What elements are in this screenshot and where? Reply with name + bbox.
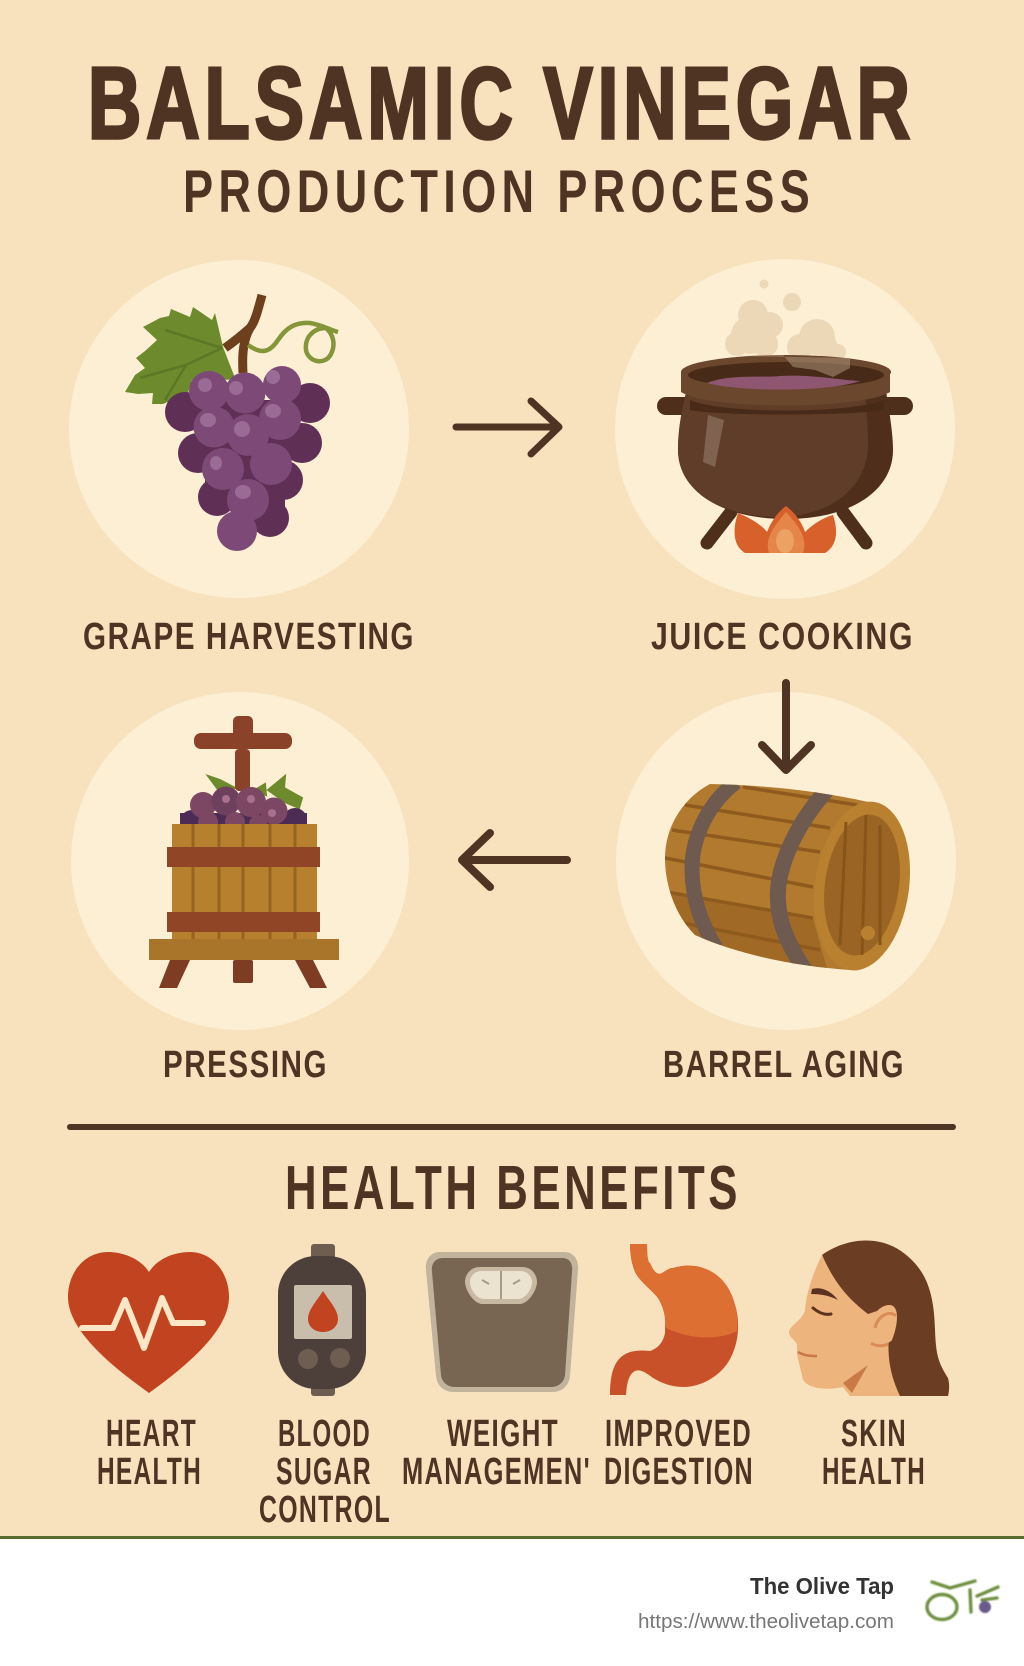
label: blood sugar control [259, 1413, 391, 1531]
divider [67, 1124, 956, 1130]
label: improved digestion: DIGESTION [604, 1451, 754, 1493]
icon: stomach [610, 1244, 738, 1395]
icon: barrel [665, 784, 910, 970]
label: barrel aging: BARREL AGING [663, 1044, 905, 1086]
label: improved digestion: IMPROVED [605, 1413, 752, 1455]
step: barrel aging [616, 692, 956, 1086]
label: skin health: SKIN [841, 1413, 907, 1455]
icon: heart [68, 1252, 229, 1393]
label: weight management: WEIGHT [447, 1413, 559, 1455]
icon: cauldron [657, 280, 913, 553]
icon: face profile [789, 1241, 949, 1396]
label: heart health: HEALTH [97, 1451, 202, 1493]
label: blood sugar control: SUGAR [276, 1451, 372, 1493]
benefit: improved digestion [604, 1244, 754, 1493]
label: improved digestion [604, 1413, 754, 1493]
logo: olive branch [927, 1581, 998, 1620]
circle background [615, 259, 955, 599]
label: juice cooking: JUICE COOKING [651, 616, 914, 658]
circle background [69, 260, 409, 598]
label: skin health: HEALTH [822, 1451, 926, 1493]
arrow: right [456, 401, 559, 454]
heading: health benefits: HEALTH BENEFITS [285, 1154, 741, 1223]
arrow: down [762, 683, 811, 770]
subtitle: PRODUCTION PROCESS [183, 158, 815, 225]
label: skin health [822, 1413, 926, 1493]
step: grape harvesting [69, 260, 415, 658]
icon: grapes [125, 295, 338, 551]
label: blood sugar control: CONTROL [259, 1489, 391, 1531]
icon: glucose meter [278, 1244, 366, 1396]
label: grape harvesting: GRAPE HARVESTING [83, 616, 415, 658]
step: pressing [71, 692, 409, 1086]
label: blood sugar control: BLOOD [278, 1413, 371, 1455]
step: juice cooking [615, 259, 955, 658]
icon: bathroom scale [426, 1252, 578, 1392]
arrow: left [462, 833, 567, 887]
icon: wine press [149, 716, 339, 988]
footer url: https://www.theolivetap.com [638, 1611, 894, 1633]
footer band [0, 1536, 1024, 1666]
circle background [616, 692, 956, 1030]
label: weight management: MANAGEMEN' [402, 1451, 591, 1493]
benefit: weight management [402, 1252, 591, 1493]
label: heart health [97, 1413, 202, 1493]
circle background [71, 692, 409, 1030]
label: pressing: PRESSING [163, 1044, 328, 1086]
label: weight management [402, 1413, 591, 1493]
label: heart health: HEART [106, 1413, 197, 1455]
benefit: heart health [68, 1252, 229, 1493]
footer brand name: The Olive Tap [750, 1573, 894, 1599]
benefit: blood sugar control [259, 1244, 391, 1531]
benefit: skin health [789, 1241, 949, 1493]
